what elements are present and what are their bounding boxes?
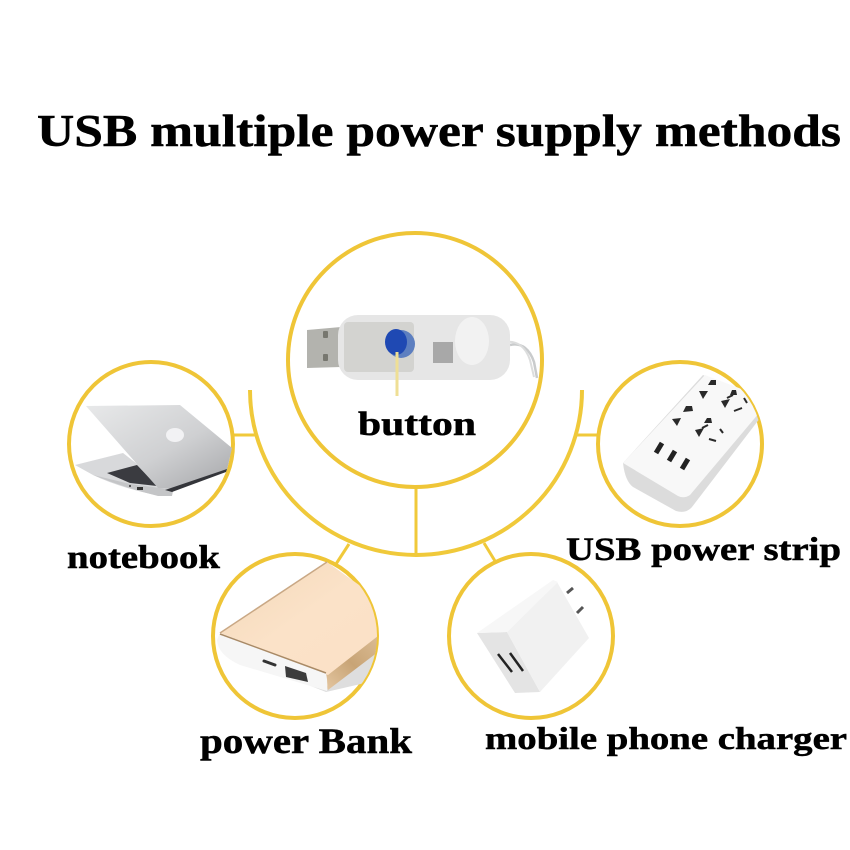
panel: power bank	[200, 554, 412, 761]
panel: USB power strip	[566, 362, 841, 568]
panel: mobile phone charger	[449, 554, 847, 756]
connector: charger	[484, 543, 495, 561]
icon: power bank	[217, 562, 380, 692]
connector: USB power strip	[576, 434, 598, 436]
icon: laptop	[75, 405, 232, 496]
icon: charger	[477, 580, 589, 693]
connector: notebook	[234, 434, 256, 436]
label: button: button	[358, 406, 476, 443]
connector: button circle	[414, 487, 418, 555]
label: USB power strip: USB power strip	[566, 532, 841, 568]
panel: notebook	[67, 362, 233, 576]
label: power Bank: power Bank	[200, 721, 412, 761]
icon: USB controller	[307, 315, 537, 380]
connector arc	[250, 390, 582, 555]
pointer line	[396, 352, 398, 396]
title: USB multiple power supply methods	[37, 106, 841, 156]
icon: power strip	[623, 375, 770, 512]
connector: power bank	[336, 544, 349, 564]
infographic	[38, 114, 846, 761]
panel: button	[288, 233, 542, 487]
label: mobile phone charger: mobile phone charger	[485, 720, 847, 756]
label: notebook: notebook	[67, 540, 221, 576]
